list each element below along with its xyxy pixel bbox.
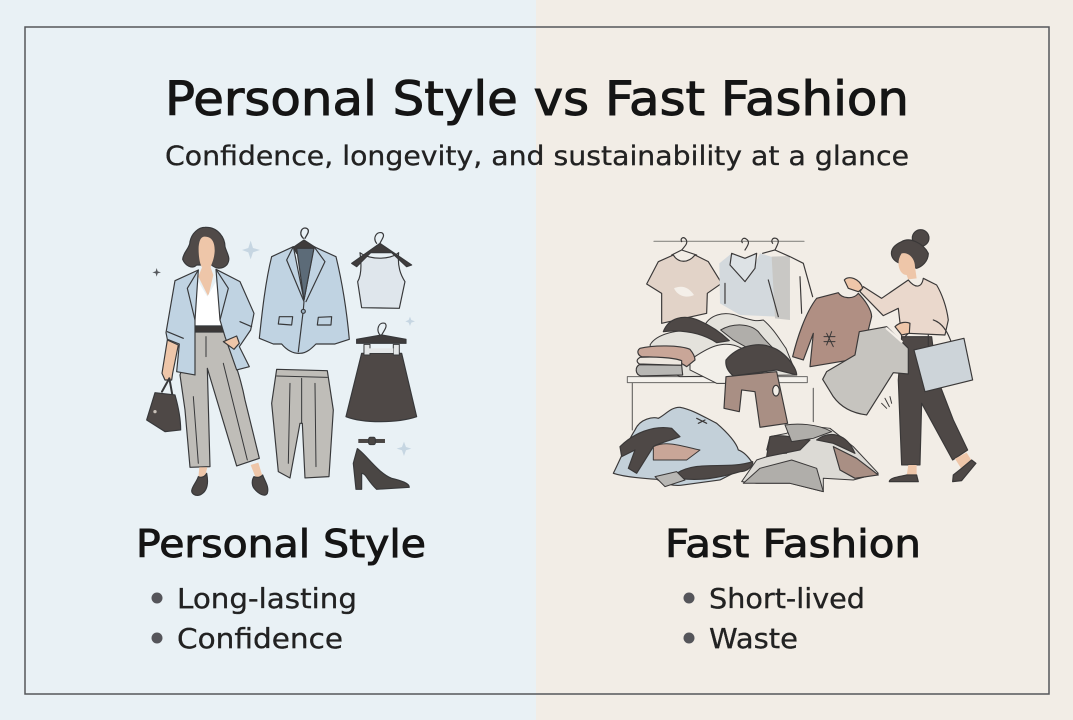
floor pile left (613, 407, 753, 487)
list: fast fashion drawbacks (684, 582, 865, 655)
icon: sparkles (152, 241, 415, 456)
held garment: sweater (793, 293, 872, 367)
arms and hand (162, 340, 178, 380)
heading: personal style: Personal Style (136, 522, 426, 566)
hair (183, 227, 229, 268)
belt (194, 326, 224, 332)
clothes rail (654, 240, 804, 243)
list: personal style benefits (152, 582, 357, 655)
garment: top on hanger (352, 233, 412, 308)
hanging shirts (719, 238, 813, 320)
accessory: belt (358, 437, 385, 445)
heading: fast fashion: Fast Fashion (665, 522, 921, 566)
clothes pile on table (636, 314, 797, 383)
blazer left (166, 270, 198, 375)
title: Personal Style vs Fast Fashion (165, 72, 909, 127)
illustration: fast fashion clutter (613, 230, 976, 492)
sweater (860, 278, 948, 337)
list: personal style benefits: Confidence (177, 622, 343, 655)
face and neck (198, 237, 215, 297)
floor pile right (742, 424, 878, 492)
list: fast fashion drawbacks: Waste (709, 622, 798, 655)
held garment: t-shirt (823, 327, 908, 415)
bag (162, 378, 173, 397)
garment: trousers (272, 369, 333, 478)
panel background: personal style (0, 0, 536, 720)
list: fast fashion drawbacks: Short-lived (709, 582, 865, 615)
face (898, 253, 917, 279)
illustration: personal style wardrobe (147, 227, 417, 495)
trousers (898, 337, 968, 465)
hand (844, 278, 863, 292)
tote bag (928, 320, 952, 350)
ankles (198, 463, 263, 478)
table (627, 377, 813, 430)
blazer right (216, 269, 254, 370)
list: personal style benefits: Long-lasting (177, 582, 357, 615)
garment: skirt on hanger (346, 323, 417, 422)
legs: trousers (180, 332, 259, 467)
hanging t-shirt (647, 238, 722, 323)
subtitle: Confidence, longevity, and sustainability at a glance (165, 141, 909, 172)
accessory: high heel shoe (353, 449, 409, 489)
shoes (192, 473, 268, 495)
shoes (889, 460, 976, 482)
figure: shopper (844, 230, 976, 482)
ankles (907, 453, 972, 476)
hair (912, 230, 929, 246)
blouse (195, 282, 221, 325)
panel background: fast fashion (536, 0, 1073, 720)
garment: blazer on hanger (259, 228, 349, 353)
hanging damaged garment (724, 372, 788, 427)
figure: woman in blazer (147, 227, 268, 495)
